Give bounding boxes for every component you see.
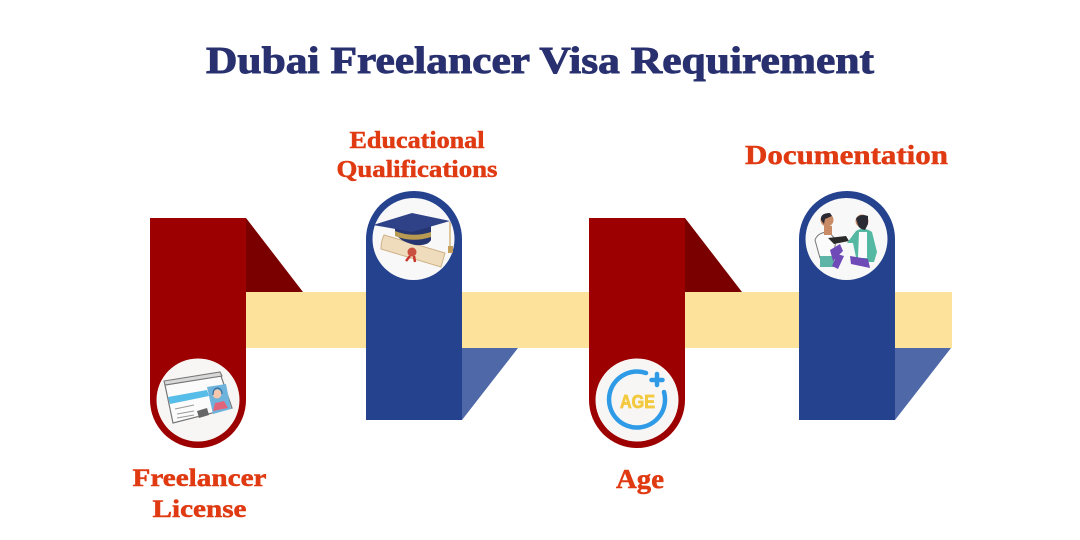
timeline band	[246, 292, 952, 348]
title: Dubai Freelancer Visa Requirement	[206, 40, 874, 82]
ribbon: Educational Qualifications	[366, 191, 518, 420]
ribbon: Documentation	[799, 191, 951, 420]
ribbon: Age	[589, 218, 742, 448]
ribbon: Freelancer License	[150, 218, 303, 448]
label: Freelancer License: Freelancer	[132, 465, 266, 492]
icon: age	[609, 372, 665, 428]
label: Educational Qualifications: Educational	[350, 128, 485, 154]
icon: licence card	[164, 372, 232, 423]
label: Documentation: Documentation	[745, 140, 948, 170]
label: Freelancer License: License	[152, 496, 246, 523]
icon: two people exchanging documents	[815, 213, 877, 269]
label: Educational Qualifications: Qualifications	[336, 157, 498, 183]
label: Age: Age	[616, 464, 664, 494]
icon: age: AGE	[620, 392, 655, 412]
icon: graduation cap and scroll	[373, 213, 453, 267]
